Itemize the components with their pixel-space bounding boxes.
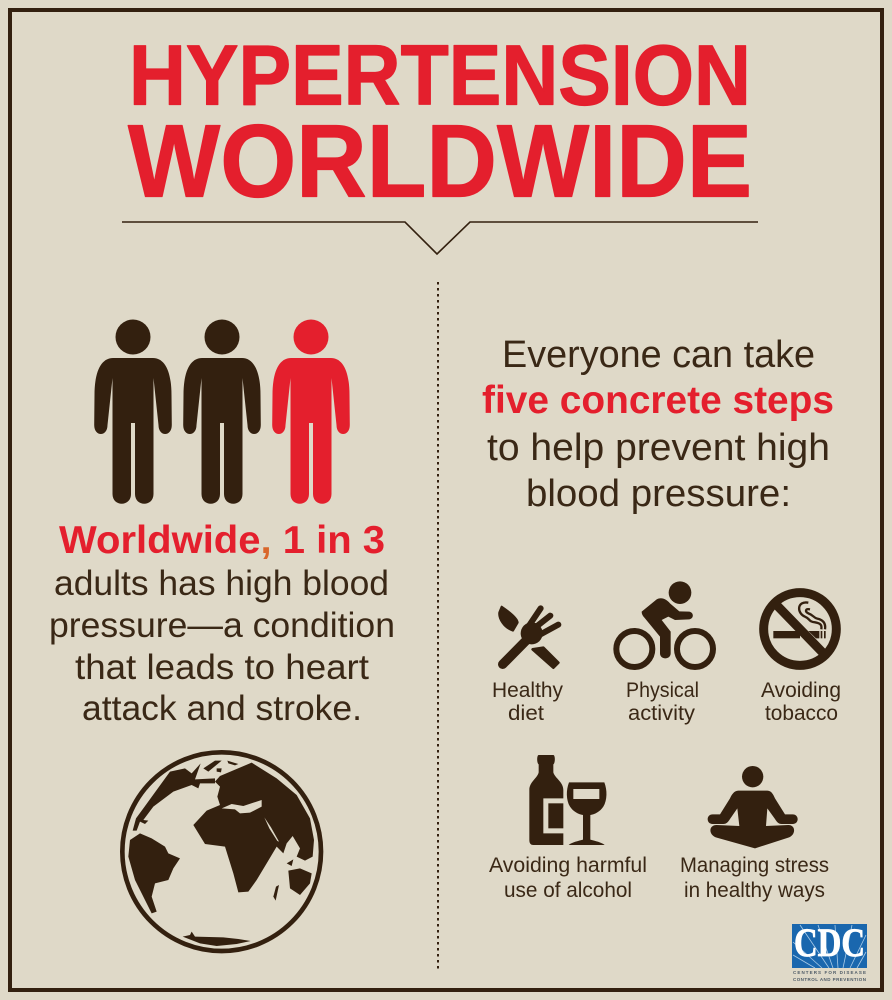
text: one in three statistic: Worldwide, 1 in 3 xyxy=(59,519,385,562)
step: managing stress: Managing stress xyxy=(680,854,829,877)
step: avoiding tobacco xyxy=(761,593,841,725)
icon: meditating figure xyxy=(708,766,798,848)
step: physical activity xyxy=(616,581,713,725)
text: one in three statistic: attack and stroke. xyxy=(82,688,362,728)
text: one in three statistic: adults has high blood xyxy=(54,563,389,603)
step: managing stress xyxy=(680,766,829,902)
CDC logo xyxy=(792,920,867,982)
icon: cyclist xyxy=(616,581,713,667)
text: five concrete steps heading: blood pressure: xyxy=(526,473,791,515)
icon: no smoking xyxy=(764,593,836,665)
step: avoiding tobacco: Avoiding xyxy=(761,679,841,702)
text: one in three statistic xyxy=(49,519,395,728)
title: HYPERTENSION xyxy=(129,28,751,124)
text: one in three statistic: pressure—a condition xyxy=(49,605,395,645)
panel: right five steps xyxy=(482,334,841,902)
icon: knife and fork xyxy=(499,607,558,668)
CDC logo: CENTERS FOR DISEASE xyxy=(793,970,866,975)
CDC logo: CDC xyxy=(794,920,865,965)
step: avoiding harmful use of alcohol: Avoiding harmful xyxy=(489,854,647,877)
title xyxy=(128,28,752,218)
step: healthy diet: Healthy xyxy=(492,679,563,702)
step: healthy diet xyxy=(492,607,563,725)
text: five concrete steps heading: Everyone can take xyxy=(502,334,815,376)
step: avoiding tobacco: tobacco xyxy=(765,702,838,725)
title pointer line xyxy=(122,222,758,254)
CDC logo: CONTROL AND PREVENTION xyxy=(793,977,866,982)
step: healthy diet: diet xyxy=(508,702,544,725)
title: WORLDWIDE xyxy=(128,104,752,218)
step: physical activity: Physical xyxy=(626,679,699,702)
step: managing stress: in healthy ways xyxy=(684,879,825,902)
icon: bottle and wine glass xyxy=(529,755,606,845)
icon: three people, one in three highlighted xyxy=(94,320,350,504)
icon: globe xyxy=(122,752,321,951)
text: five concrete steps heading: to help prevent high xyxy=(487,427,830,469)
panel: left statistic xyxy=(49,320,395,951)
text: five concrete steps heading xyxy=(482,334,834,515)
step: avoiding harmful use of alcohol: use of alcohol xyxy=(504,879,632,902)
step: physical activity: activity xyxy=(628,702,696,725)
text: one in three statistic: that leads to heart xyxy=(75,647,369,687)
text: five concrete steps heading: five concrete steps xyxy=(482,379,834,422)
step: avoiding harmful use of alcohol xyxy=(489,755,647,902)
